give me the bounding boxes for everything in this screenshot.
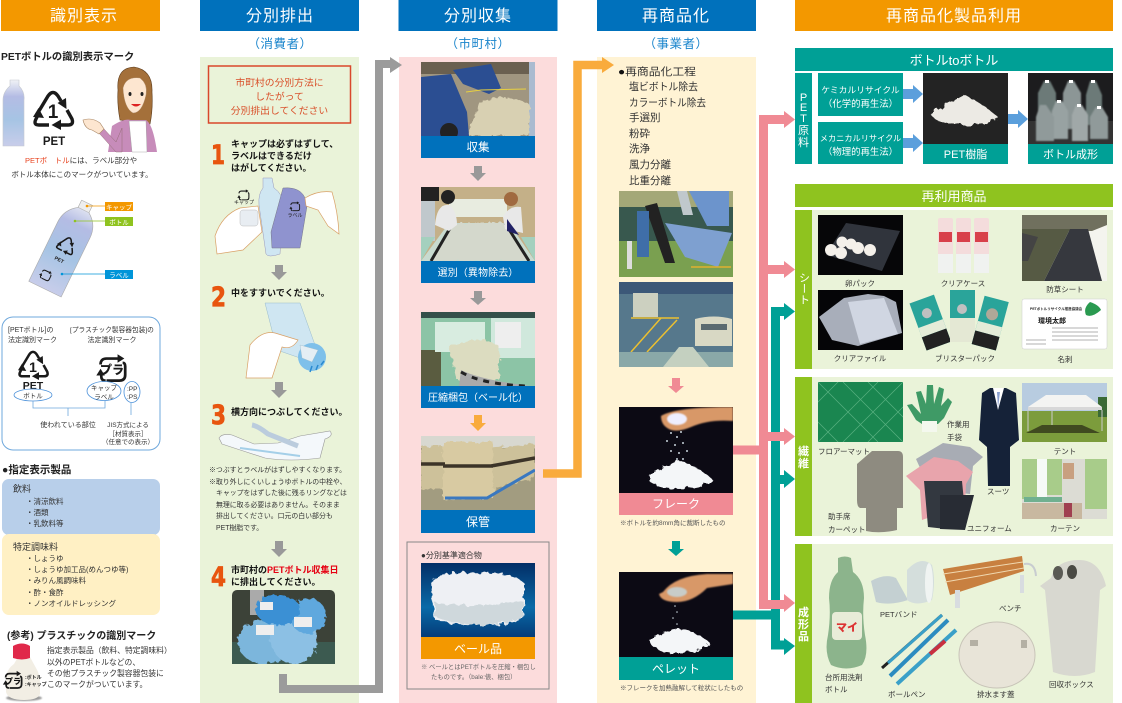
product: detergent bottle: マイ <box>836 621 858 634</box>
text: step 3 notes: ※取り外しにくいしょうゆボトルの中栓や、 <box>209 477 346 486</box>
text: recycling process list: ●再商品化工程 <box>618 65 697 78</box>
product: ball pens: ボールペン <box>888 690 926 699</box>
panel: legal identification marks: :PP <box>127 386 137 393</box>
icon: squeeze bottle: :ボトル <box>25 674 42 681</box>
icon: PET mark: 1 <box>29 360 37 376</box>
heading: bottle to bottle <box>795 48 1113 71</box>
panel: seasonings: 特定調味料 <box>13 541 58 552</box>
product: carpet <box>828 451 903 534</box>
heading: 再利用商品 <box>795 184 1113 207</box>
panel: sheet products <box>795 210 1113 369</box>
panel: legal identification marks <box>2 317 160 450</box>
product: collection box: 回収ボックス <box>1049 680 1094 689</box>
step 3 <box>209 400 347 532</box>
product: floor mat: フロアーマット <box>818 447 870 456</box>
arrow: gray consumer to municipality <box>283 64 392 689</box>
text: mark caption: PETボ トルには、ラベル部分や <box>25 156 137 165</box>
arrow: orange municipality to business <box>543 65 606 474</box>
icon: PET bottle <box>3 80 24 146</box>
panel: legal identification marks: [プラスチック製容器包装]の <box>70 325 154 334</box>
step: 収集 photo and label: 収集 <box>466 140 490 154</box>
photo: factory 1 <box>619 191 733 277</box>
panel: 識別表示 column <box>1 50 172 701</box>
panel: seasonings: ・みりん風調味料 <box>26 575 86 585</box>
icon: squeeze bottle: プラ <box>5 676 21 686</box>
arrow: teal <box>668 541 684 556</box>
product: collection box <box>1040 560 1106 689</box>
photo and label: bottle forming: ボトル成形 <box>1043 148 1098 161</box>
panel: legal identification marks: JIS方式による <box>107 420 149 429</box>
step: 収集 photo and label <box>421 62 535 158</box>
panel: legal identification marks: 法定識別マーク <box>8 335 57 344</box>
heading: 識別表示: 識別表示 <box>50 7 118 25</box>
callout: label label: ラベル <box>109 272 129 280</box>
text: plastic mark description: このマークがついています。 <box>47 679 147 689</box>
arrow: step 2 to 3 <box>271 382 287 398</box>
heading: 識別表示 <box>1 0 160 31</box>
text: mark caption <box>11 156 153 179</box>
panel: legal identification marks: :PS <box>127 394 138 401</box>
callout: bottle label: ボトル <box>109 218 129 226</box>
arrowhead: orange <box>602 57 614 73</box>
photo: collection bags <box>232 590 335 664</box>
heading: PET mark title: PETボトルの識別表示マーク <box>1 50 134 63</box>
product: suit <box>979 388 1019 496</box>
panel: 分別収集 flow <box>407 62 549 689</box>
product: weed sheet: 防草シート <box>1046 284 1084 294</box>
photo: factory 2 <box>619 282 733 367</box>
panel: seasonings <box>2 534 160 615</box>
product: blister pack: ブリスターパック <box>935 353 995 363</box>
text: recycling process list: カラーボトル除去 <box>629 96 706 109</box>
text: recycling process list: 手選別 <box>629 111 660 124</box>
icon: PET recycling mark <box>33 92 72 148</box>
heading: 分別収集: 分別収集 <box>444 7 512 25</box>
arrow: mech to resin <box>903 134 923 152</box>
text: plastic mark description: その他プラスチック製容器包装に <box>47 668 164 678</box>
text: step 3 notes: 無理に取る必要はありません。そのまま <box>216 500 340 509</box>
illustration: rinsing <box>246 303 326 378</box>
text: plastic mark description <box>47 645 172 689</box>
product: business card: PETボトルリサイクル推進協議会 <box>1030 306 1083 311</box>
product: clear file: クリアファイル <box>834 354 887 363</box>
callout: red instruction box: したがって <box>255 90 304 103</box>
product: floor mat <box>798 372 913 456</box>
heading: designated products: ●指定表示製品 <box>2 463 71 476</box>
callout: cap label <box>86 202 133 212</box>
label: 成形品: 成 <box>798 605 809 619</box>
panel backgrounds <box>200 57 756 703</box>
illustration: crushed bottle <box>219 425 331 460</box>
connector: teal pellet routes <box>733 303 795 655</box>
callout: red instruction box <box>208 66 350 123</box>
product: bench <box>943 556 1036 613</box>
text: plastic mark description: 以外のPETボトルなどの、 <box>47 657 140 667</box>
photo and label: PET resin <box>923 73 1008 164</box>
panel: beverages: 飲料 <box>13 483 31 494</box>
illustration: removing cap and label: ラベル <box>287 213 303 219</box>
product: curtain: カーテン <box>1050 524 1080 533</box>
text: recycling process list: 風力分離 <box>629 158 671 171</box>
subheading: 市町村: （市町村） <box>445 37 511 51</box>
product: egg pack: 卵パック <box>845 278 875 288</box>
photo and label: flake: フレーク <box>652 497 700 511</box>
panel: legal identification marks: 使われている部位 <box>40 420 96 429</box>
product: suit: スーツ <box>987 487 1009 496</box>
step: 選別 photo and label: 選別（異物除去） <box>438 266 518 279</box>
panel: beverages: ・酒類 <box>26 507 49 517</box>
panel: 分別排出 steps <box>208 66 350 664</box>
text: recycling process list: 比重分離 <box>629 174 671 187</box>
panel: 再商品化 process <box>618 65 743 692</box>
heading: 再利用商品: 再利用商品 <box>921 189 987 204</box>
box: chemical recycling: （化学的再生法） <box>823 98 898 109</box>
product: bench: ベンチ <box>999 604 1022 613</box>
callout: red instruction box: 分別排出してください <box>231 104 328 117</box>
panel: legal identification marks: キャップ <box>91 384 118 392</box>
icon: plastic mark <box>96 354 125 381</box>
product: drain cover <box>959 622 1035 699</box>
text: step 3 notes: キャップをはずした後に残るリングなどは <box>216 488 347 497</box>
step 4: 市町村のPETボトル収集日 <box>231 564 339 575</box>
icon: squeeze bottle <box>3 644 47 701</box>
product: uniform <box>906 443 1012 533</box>
label: 成形品: 品 <box>798 630 809 643</box>
icon: PET recycling mark: PET <box>43 136 65 148</box>
panel: legal identification marks: ボトル <box>23 392 43 400</box>
product: detergent bottle <box>825 556 866 694</box>
step 1: ラベルはできるだけ <box>231 151 312 161</box>
text: mark caption: ボトル本体にこのマークがついています。 <box>11 169 153 179</box>
label: PET raw material <box>795 73 812 164</box>
panel: legal identification marks: [PETボトル]の <box>8 326 54 334</box>
heading: 再商品化製品利用 <box>795 0 1113 31</box>
heading: 再商品化製品利用: 再商品化製品利用 <box>886 7 1022 25</box>
text: step 3 notes: PET樹脂です。 <box>216 523 263 532</box>
panel: fiber products <box>795 372 1113 536</box>
step 2: 2 <box>211 282 226 313</box>
note: pellet: ※フレークを加熱融解して粒状にしたもの <box>620 683 743 692</box>
step: 選別 photo and label <box>421 187 535 283</box>
text: recycling process list: 塩ビボトル除去 <box>629 80 698 93</box>
icon: PET mark <box>18 352 48 380</box>
photo and label: PET resin: PET樹脂 <box>944 147 987 161</box>
label: PET raw material: 料 <box>798 135 809 149</box>
subheading: 事業者: （事業者） <box>643 36 709 51</box>
text: step 3 notes: ※つぶすとラベルがはずしやすくなります。 <box>209 465 346 474</box>
arrow <box>470 166 486 181</box>
callout: bottle label <box>74 217 133 226</box>
illustration: removing cap and label: キャップ <box>234 200 254 206</box>
product: carpet: 助手席 <box>828 511 851 521</box>
text: step 3 notes <box>209 465 347 532</box>
panel: bale product: ベール品 <box>454 642 502 656</box>
product: business card: 環境太郎 <box>1038 316 1066 325</box>
label: PET raw material: P <box>800 92 807 104</box>
heading: 分別排出 <box>200 0 359 31</box>
product: egg pack <box>818 215 903 288</box>
label: 繊維: 維 <box>798 456 809 470</box>
label: 成形品 <box>795 544 812 703</box>
product: work gloves: 手袋 <box>947 432 962 442</box>
box: mechanical recycling: メカニカルリサイクル <box>820 134 901 143</box>
panel: legal identification marks: （任意での表示） <box>102 437 154 446</box>
photo and label: pellet <box>619 572 733 680</box>
text: recycling process list: 粉砕 <box>629 127 650 140</box>
panel: legal identification marks: 法定識別マーク <box>88 335 136 344</box>
panel: beverages: ・乳飲料等 <box>26 518 64 528</box>
product: business card: 名刺 <box>1058 354 1072 364</box>
product: clear file <box>818 290 903 363</box>
step: 圧縮梱包 photo and label <box>421 312 535 408</box>
step 1: 1 <box>211 140 225 171</box>
callout: label label <box>61 270 133 280</box>
arrow: orange <box>470 415 486 431</box>
step 4: 4 <box>211 562 226 593</box>
arrow: chem to resin <box>903 85 923 103</box>
product: carpet: カーペット <box>828 525 866 534</box>
heading: bottle to bottle: ボトルtoボトル <box>910 53 998 68</box>
label: PET raw material: E <box>800 102 807 114</box>
callout: red instruction box: 市町村の分別方法に <box>235 76 324 89</box>
note: flake: ※ボトルを約8mm角に裁断したもの <box>620 518 725 527</box>
product: detergent bottle: 台所用洗剤 <box>825 672 862 682</box>
photo: bale <box>421 563 535 637</box>
step 1 <box>211 138 339 256</box>
panel: bale product: ●分別基準適合物 <box>421 550 482 560</box>
label: 繊維 <box>795 377 812 536</box>
icon: tilted bottle with mark <box>29 195 103 297</box>
panel: beverages: ・清涼飲料 <box>26 496 64 506</box>
icon: squeeze bottle: :キャップ <box>25 681 47 688</box>
product: tent: テント <box>1054 447 1076 456</box>
icon: plastic mark: プラ <box>100 363 124 377</box>
text: recycling process list <box>618 65 706 187</box>
icon: woman pointing <box>83 67 157 152</box>
arrow: step 1 to 2 <box>271 265 287 280</box>
step 1: キャップは必ずはずして、 <box>231 138 338 149</box>
product: clear case: クリアケース <box>941 279 985 288</box>
step 1: はがしてください。 <box>231 162 311 173</box>
panel: bottle to bottle <box>795 48 1113 164</box>
step 4 <box>211 562 339 664</box>
subheading: 消費者: （消費者） <box>247 36 313 51</box>
panel: seasonings: ・ノンオイルドレッシング <box>26 598 116 608</box>
step: 圧縮梱包 photo and label: 圧縮梱包（ベール化） <box>428 391 528 404</box>
panel: seasonings: ・しょうゆ加工品(めんつゆ等) <box>26 564 129 574</box>
connector: pink flake routes <box>733 111 795 612</box>
panel: bale product: ※ ベールとはPETボトルを圧縮・梱包し <box>421 662 536 671</box>
label: 成形品: 形 <box>798 618 809 631</box>
label: PET raw material: T <box>800 113 807 125</box>
text: step 3 notes: 排出してください。口元の白い部分も <box>216 511 333 520</box>
panel: bale product <box>407 542 549 689</box>
panel: legal identification marks: ラベル <box>94 393 114 401</box>
panel: seasonings: ・しょうゆ <box>26 554 64 563</box>
box: chemical recycling: ケミカルリサイクル <box>821 85 900 95</box>
product: tent <box>1022 383 1107 456</box>
step: 保管 photo and label <box>421 436 535 533</box>
photo and label: pellet: ペレット <box>652 662 700 676</box>
arrowhead: gray <box>390 57 402 73</box>
box: mechanical recycling <box>818 122 903 164</box>
label: 繊維: 繊 <box>798 444 809 458</box>
product: curtain <box>1022 459 1107 533</box>
box: chemical recycling <box>818 73 903 116</box>
panel: molded products <box>795 544 1113 703</box>
product: PET band: PETバンド <box>880 610 917 619</box>
product: weed sheet <box>1022 215 1107 294</box>
product: business card <box>1022 299 1107 364</box>
illustration: removing cap and label <box>215 178 339 256</box>
heading: 再商品化: 再商品化 <box>642 7 710 25</box>
icon: PET recycling mark: 1 <box>48 102 59 123</box>
product: work gloves: 作業用 <box>947 419 970 429</box>
heading: 分別収集 <box>398 0 558 31</box>
callout: cap label: キャップ <box>106 204 132 212</box>
step 3: 3 <box>211 400 226 431</box>
panel: beverages <box>2 479 160 535</box>
arrow: pink <box>668 378 684 393</box>
product: drain cover: 排水ます蓋 <box>977 689 1015 699</box>
panel: legal identification marks: ［材質表示］ <box>108 429 148 438</box>
product: work gloves <box>907 385 970 442</box>
step 3: 横方向につぶしてください。 <box>231 406 347 417</box>
step: 保管 photo and label: 保管 <box>466 514 490 529</box>
heading: plastic mark reference: (参考) プラスチックの識別マーク <box>7 629 156 642</box>
heading: 再商品化 <box>597 0 756 31</box>
product: PET band <box>871 561 934 619</box>
heading: 分別排出: 分別排出 <box>246 7 314 25</box>
label: シート: シート <box>798 272 810 305</box>
arrow <box>470 291 486 305</box>
icon: tilted bottle with mark: PET <box>53 256 65 265</box>
label: シート <box>795 210 812 369</box>
text: recycling process list: 洗浄 <box>629 142 650 155</box>
product: uniform: ユニフォーム <box>967 524 1012 533</box>
text: plastic mark description: 指定表示製品（飲料、特定調味料） <box>47 645 172 655</box>
step 4: に排出してください。 <box>231 576 320 587</box>
box: mechanical recycling: （物理的再生法） <box>823 146 898 157</box>
panel: seasonings: ・酢・食酢 <box>26 587 64 597</box>
arrow: step 3 to 4 <box>271 541 287 557</box>
arrow: resin to bottle <box>1008 110 1028 128</box>
product: detergent bottle: ボトル <box>825 685 848 694</box>
step 2: 中をすすいでください。 <box>231 287 330 298</box>
product: clear case <box>937 218 990 288</box>
panel: bale product: たものです。（bale:俵、梱包） <box>431 672 516 681</box>
step 2 <box>211 282 330 378</box>
product: ball pens <box>882 615 956 699</box>
product: blister pack <box>910 290 1009 363</box>
label: PET raw material: 原 <box>798 125 809 137</box>
photo and label: bottle forming <box>1028 73 1113 164</box>
photo and label: flake <box>619 407 733 515</box>
panel: legal identification marks: PET <box>23 380 44 392</box>
